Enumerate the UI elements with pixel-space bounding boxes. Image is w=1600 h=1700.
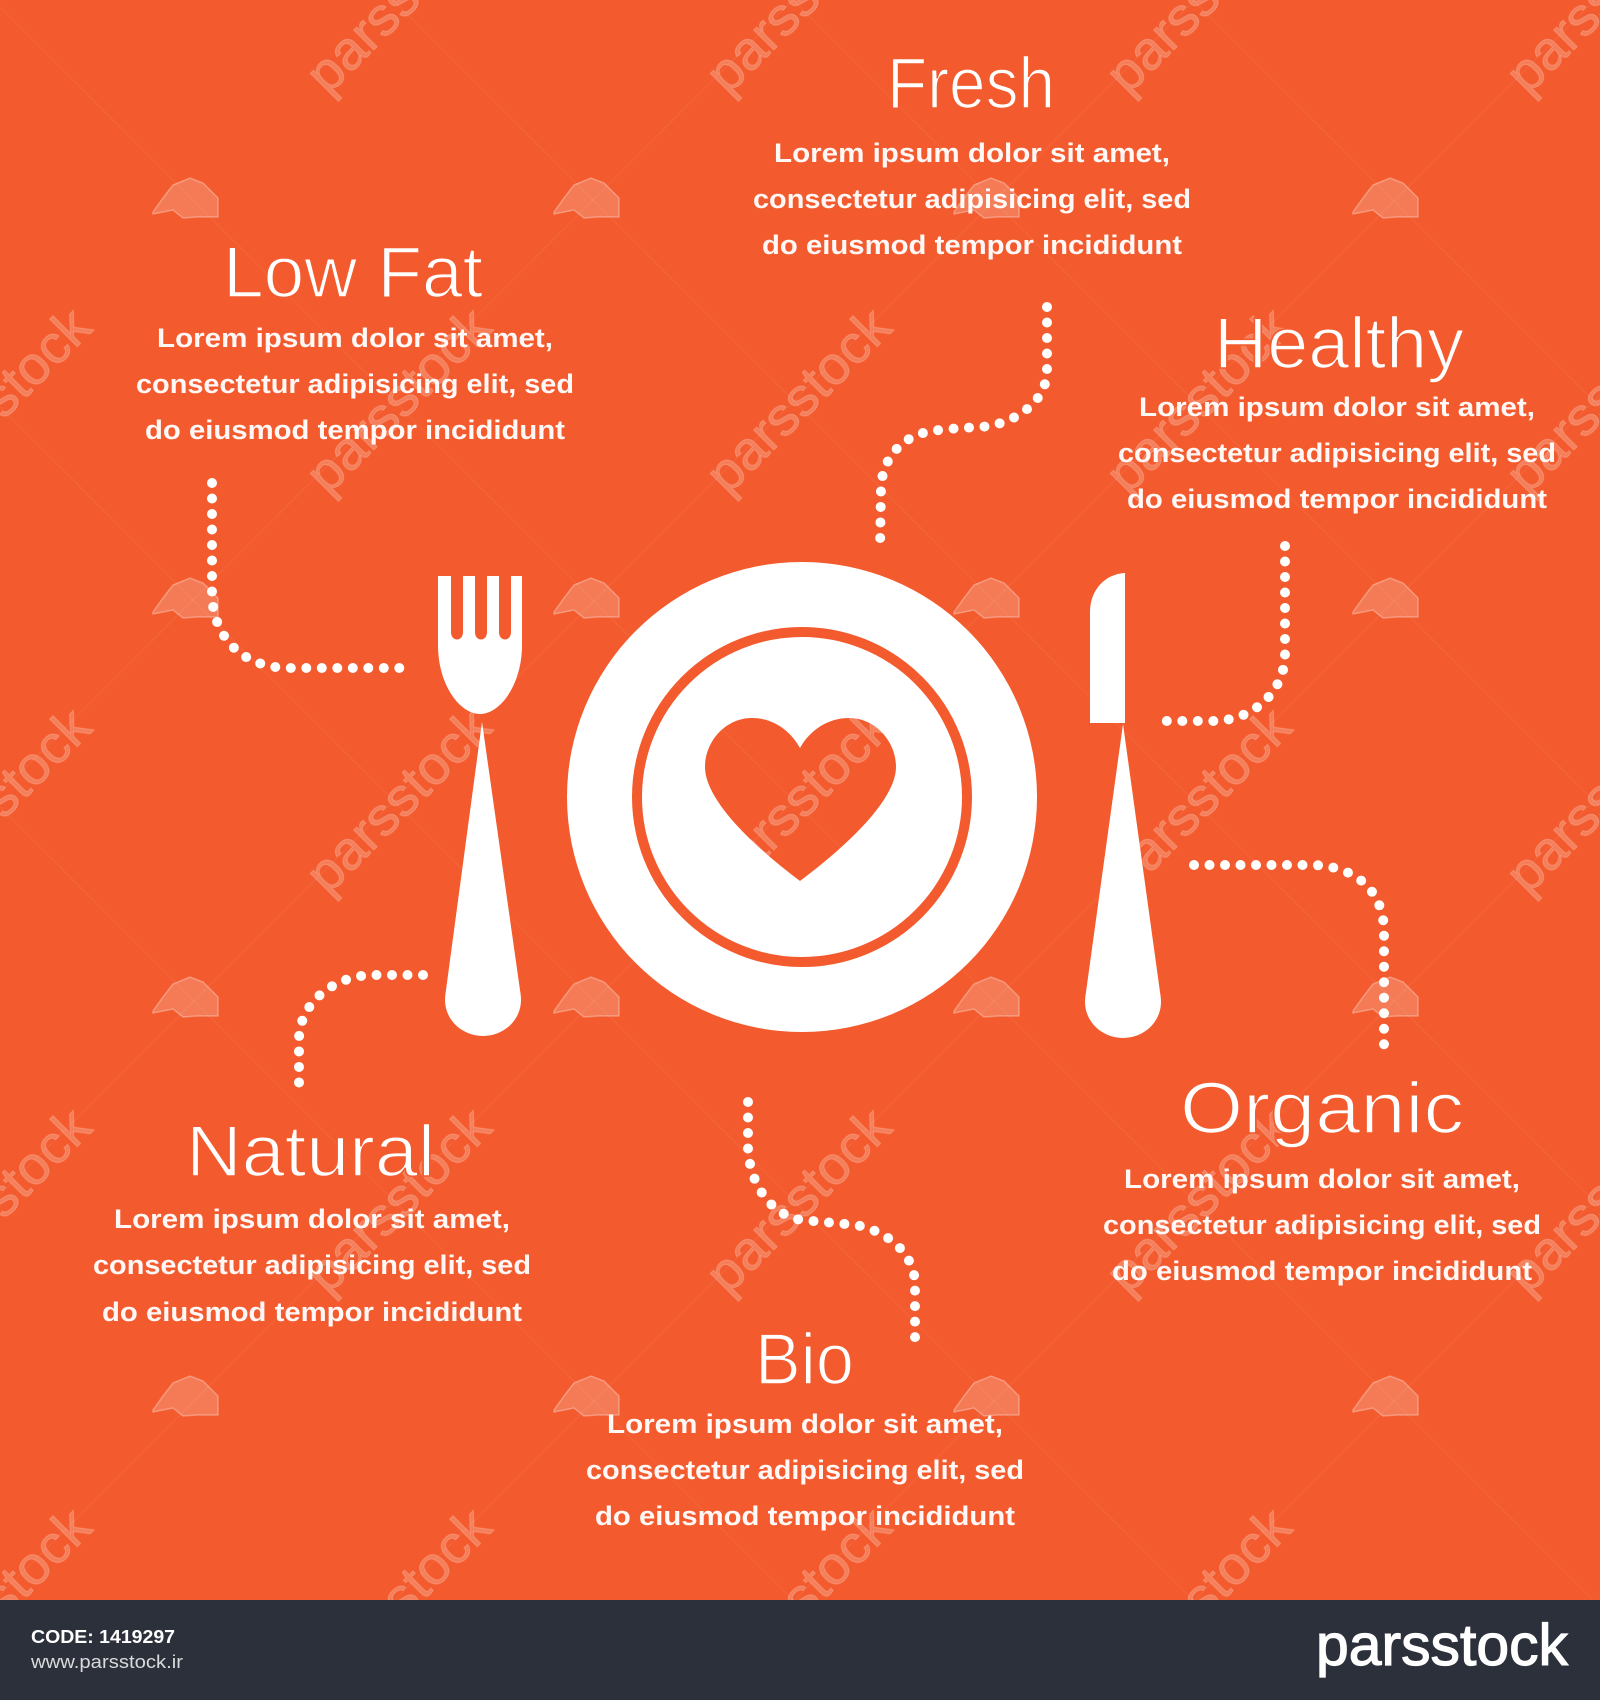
panel: Healthy xyxy=(1118,304,1556,514)
text block: Low Fat: Lorem ipsum dolor sit amet, xyxy=(157,323,553,353)
panel: Natural xyxy=(93,1112,531,1327)
icon: fork xyxy=(438,576,522,1036)
dotted connector: Low Fat xyxy=(212,483,405,668)
text block: Healthy: Lorem ipsum dolor sit amet, xyxy=(1139,392,1535,422)
heading: Bio: Bio xyxy=(755,1320,854,1400)
watermark layer: parsstock xyxy=(1094,1095,1303,1305)
text block: Bio: do eiusmod tempor incididunt xyxy=(595,1501,1015,1531)
watermark layer: parsstock xyxy=(694,295,903,505)
heading: Fresh: Fresh xyxy=(887,44,1055,124)
panel: Bio xyxy=(586,1320,1024,1531)
watermark layer: parsstock xyxy=(1094,1495,1303,1700)
footer logo: parsstock xyxy=(1316,1613,1569,1678)
dotted connector: Natural xyxy=(299,975,423,1094)
watermark layer: parsstock xyxy=(294,295,503,505)
dotted connector: Organic xyxy=(1194,865,1384,1055)
watermark layer: parsstock xyxy=(294,695,503,905)
heading: Low Fat: Low Fat xyxy=(223,233,483,313)
text block: Organic: do eiusmod tempor incididunt xyxy=(1112,1256,1532,1286)
text block: Organic: Lorem ipsum dolor sit amet, xyxy=(1124,1164,1520,1194)
text block: Bio: consectetur adipisicing elit, sed xyxy=(586,1455,1024,1485)
text block: Bio xyxy=(586,1409,1024,1531)
dotted connector: Bio xyxy=(748,1102,915,1344)
panel: Low Fat xyxy=(136,233,574,445)
text block: Organic xyxy=(1103,1164,1541,1286)
footer url: www.parsstock.ir xyxy=(30,1652,183,1672)
heading: Organic: Organic xyxy=(1180,1069,1464,1149)
text block: Natural: Lorem ipsum dolor sit amet, xyxy=(114,1204,510,1234)
icon: plate with heart xyxy=(567,562,1037,1032)
text block: Low Fat: do eiusmod tempor incididunt xyxy=(145,415,565,445)
icon: knife xyxy=(1085,573,1161,1038)
heading: Healthy: Healthy xyxy=(1214,304,1464,384)
watermark layer: parsstock xyxy=(294,1095,503,1305)
text block: Healthy: do eiusmod tempor incididunt xyxy=(1127,484,1547,514)
text block: Natural: consectetur adipisicing elit, sed xyxy=(93,1250,531,1280)
text block: Healthy: consectetur adipisicing elit, sed xyxy=(1118,438,1556,468)
dotted connector: Fresh xyxy=(880,307,1047,548)
watermark layer: parsstock xyxy=(294,1495,503,1700)
text block: Fresh: consectetur adipisicing elit, sed xyxy=(753,184,1191,214)
text block: Low Fat: consectetur adipisicing elit, sed xyxy=(136,369,574,399)
watermark layer: parsstock xyxy=(1094,695,1303,905)
text block: Natural xyxy=(93,1204,531,1327)
heading: Natural: Natural xyxy=(186,1112,435,1192)
text block: Fresh: do eiusmod tempor incididunt xyxy=(762,230,1182,260)
watermark layer: parsstock xyxy=(1094,295,1303,505)
panel: Organic xyxy=(1103,1069,1541,1286)
text block: Natural: do eiusmod tempor incididunt xyxy=(102,1297,522,1327)
footer code: CODE: 1419297 xyxy=(31,1627,175,1647)
text block: Healthy xyxy=(1118,392,1556,514)
text block: Organic: consectetur adipisicing elit, sed xyxy=(1103,1210,1541,1240)
watermark layer: parsstock xyxy=(694,695,903,905)
text block: Bio: Lorem ipsum dolor sit amet, xyxy=(607,1409,1003,1439)
panel: Fresh xyxy=(753,44,1191,260)
text block: Fresh xyxy=(753,138,1191,260)
text block: Low Fat xyxy=(136,323,574,445)
text block: Fresh: Lorem ipsum dolor sit amet, xyxy=(774,138,1170,168)
dotted connector: Healthy xyxy=(1162,546,1285,721)
watermark layer: parsstock xyxy=(694,1495,903,1700)
footer bar xyxy=(0,1600,1600,1700)
watermark layer: parsstock xyxy=(694,1095,903,1305)
